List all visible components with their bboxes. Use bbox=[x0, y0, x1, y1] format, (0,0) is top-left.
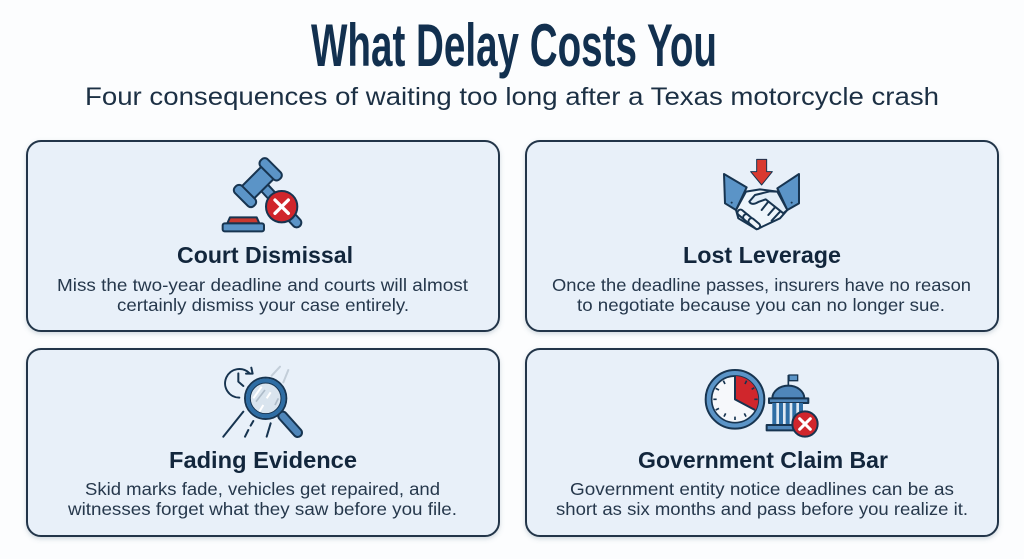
icon: gavel with red x bbox=[223, 156, 297, 231]
icon: clock and government building bbox=[706, 370, 818, 437]
description: Skid marks fade, vehicles get repaired, and bbox=[85, 479, 440, 499]
heading: Fading Evidence bbox=[169, 447, 357, 473]
panel: court dismissal bbox=[27, 141, 499, 331]
description: to negotiate because you can no longer sue. bbox=[577, 295, 945, 315]
description: short as six months and pass before you realize it. bbox=[556, 499, 968, 519]
heading: Lost Leverage bbox=[683, 242, 841, 268]
panel: fading evidence bbox=[27, 349, 499, 536]
icon: handshake with down arrow bbox=[724, 159, 799, 230]
description bbox=[556, 479, 968, 519]
subtitle: Four consequences of waiting too long after a Texas motorcycle crash bbox=[85, 83, 939, 111]
heading: Court Dismissal bbox=[177, 242, 353, 268]
description: Once the deadline passes, insurers have no reason bbox=[552, 275, 971, 295]
panel: lost leverage bbox=[526, 141, 998, 331]
description bbox=[67, 479, 457, 519]
description: certainly dismiss your case entirely. bbox=[117, 295, 409, 315]
icon: magnifier with clock and skid marks bbox=[223, 367, 298, 437]
heading: Government Claim Bar bbox=[638, 447, 888, 473]
description bbox=[57, 275, 468, 315]
panel: government claim bar bbox=[526, 349, 998, 536]
title: What Delay Costs You bbox=[311, 12, 717, 79]
description bbox=[552, 275, 971, 315]
description: Government entity notice deadlines can be as bbox=[570, 479, 954, 499]
description: witnesses forget what they saw before you file. bbox=[67, 499, 457, 519]
description: Miss the two-year deadline and courts will almost bbox=[57, 275, 468, 295]
